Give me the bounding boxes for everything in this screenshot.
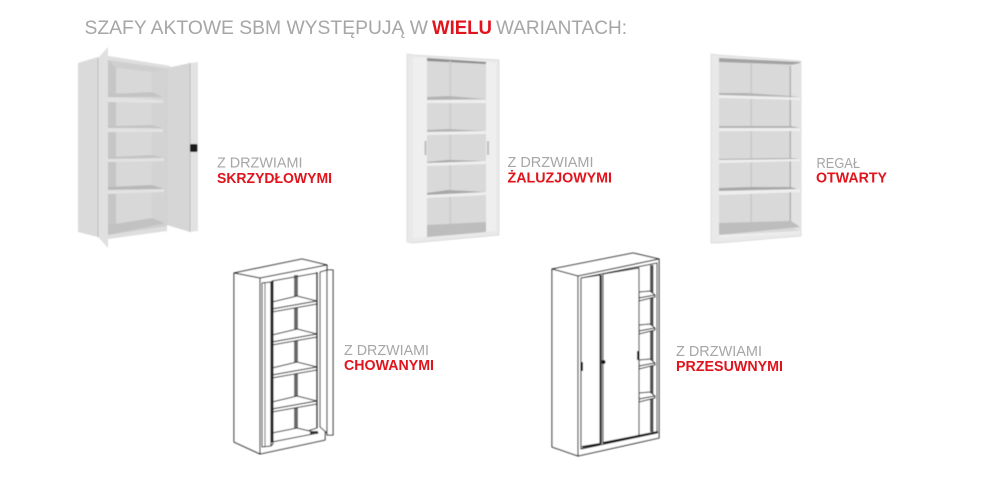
label: hinged doors: [217, 156, 332, 187]
title: [84, 17, 627, 39]
label: sliding doors: Z DRZWIAMI: [676, 344, 762, 360]
cabinet: open shelving: [711, 54, 801, 243]
label: hinged doors: SKRZYDŁOWYMI: [217, 171, 332, 187]
label: open shelving: REGAŁ: [816, 156, 860, 172]
label: open shelving: [816, 156, 887, 186]
title: WIELU: [432, 17, 492, 39]
cabinet: sliding doors: [552, 253, 659, 456]
icon: centre door handle: [637, 351, 639, 360]
title: WARIANTACH:: [496, 17, 627, 39]
label: roller shutter doors: Z DRZWIAMI: [508, 155, 594, 171]
label: hinged doors: Z DRZWIAMI: [217, 156, 302, 172]
icon: door lock: [190, 144, 198, 152]
label: open shelving: OTWARTY: [816, 170, 887, 186]
cabinet: hinged doors: [78, 47, 198, 248]
label: sliding doors: [676, 344, 783, 375]
icon: door lock: [602, 360, 606, 364]
label: roller shutter doors: [508, 155, 612, 186]
label: roller shutter doors: ŻALUZJOWYMI: [508, 170, 612, 186]
icon: left door handle: [581, 362, 583, 371]
cabinet: retractable doors: [234, 259, 333, 454]
label: retractable doors: Z DRZWIAMI: [344, 343, 429, 359]
title: SZAFY AKTOWE SBM WYSTĘPUJĄ W: [84, 17, 429, 39]
shelves: [639, 291, 655, 402]
label: retractable doors: [344, 343, 434, 374]
label: retractable doors: CHOWANYMI: [344, 358, 434, 374]
label: sliding doors: PRZESUWNYMI: [676, 359, 783, 375]
cabinet: roller shutter doors: [407, 54, 499, 243]
shelves: [272, 296, 317, 412]
